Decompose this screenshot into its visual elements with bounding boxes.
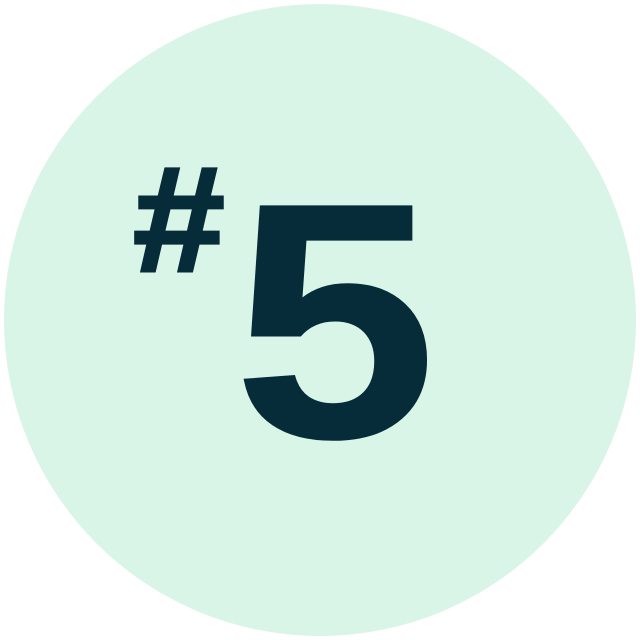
label: rank number: # [133,136,225,303]
label: rank number [133,134,437,509]
label: rank number: 5 [233,134,437,509]
